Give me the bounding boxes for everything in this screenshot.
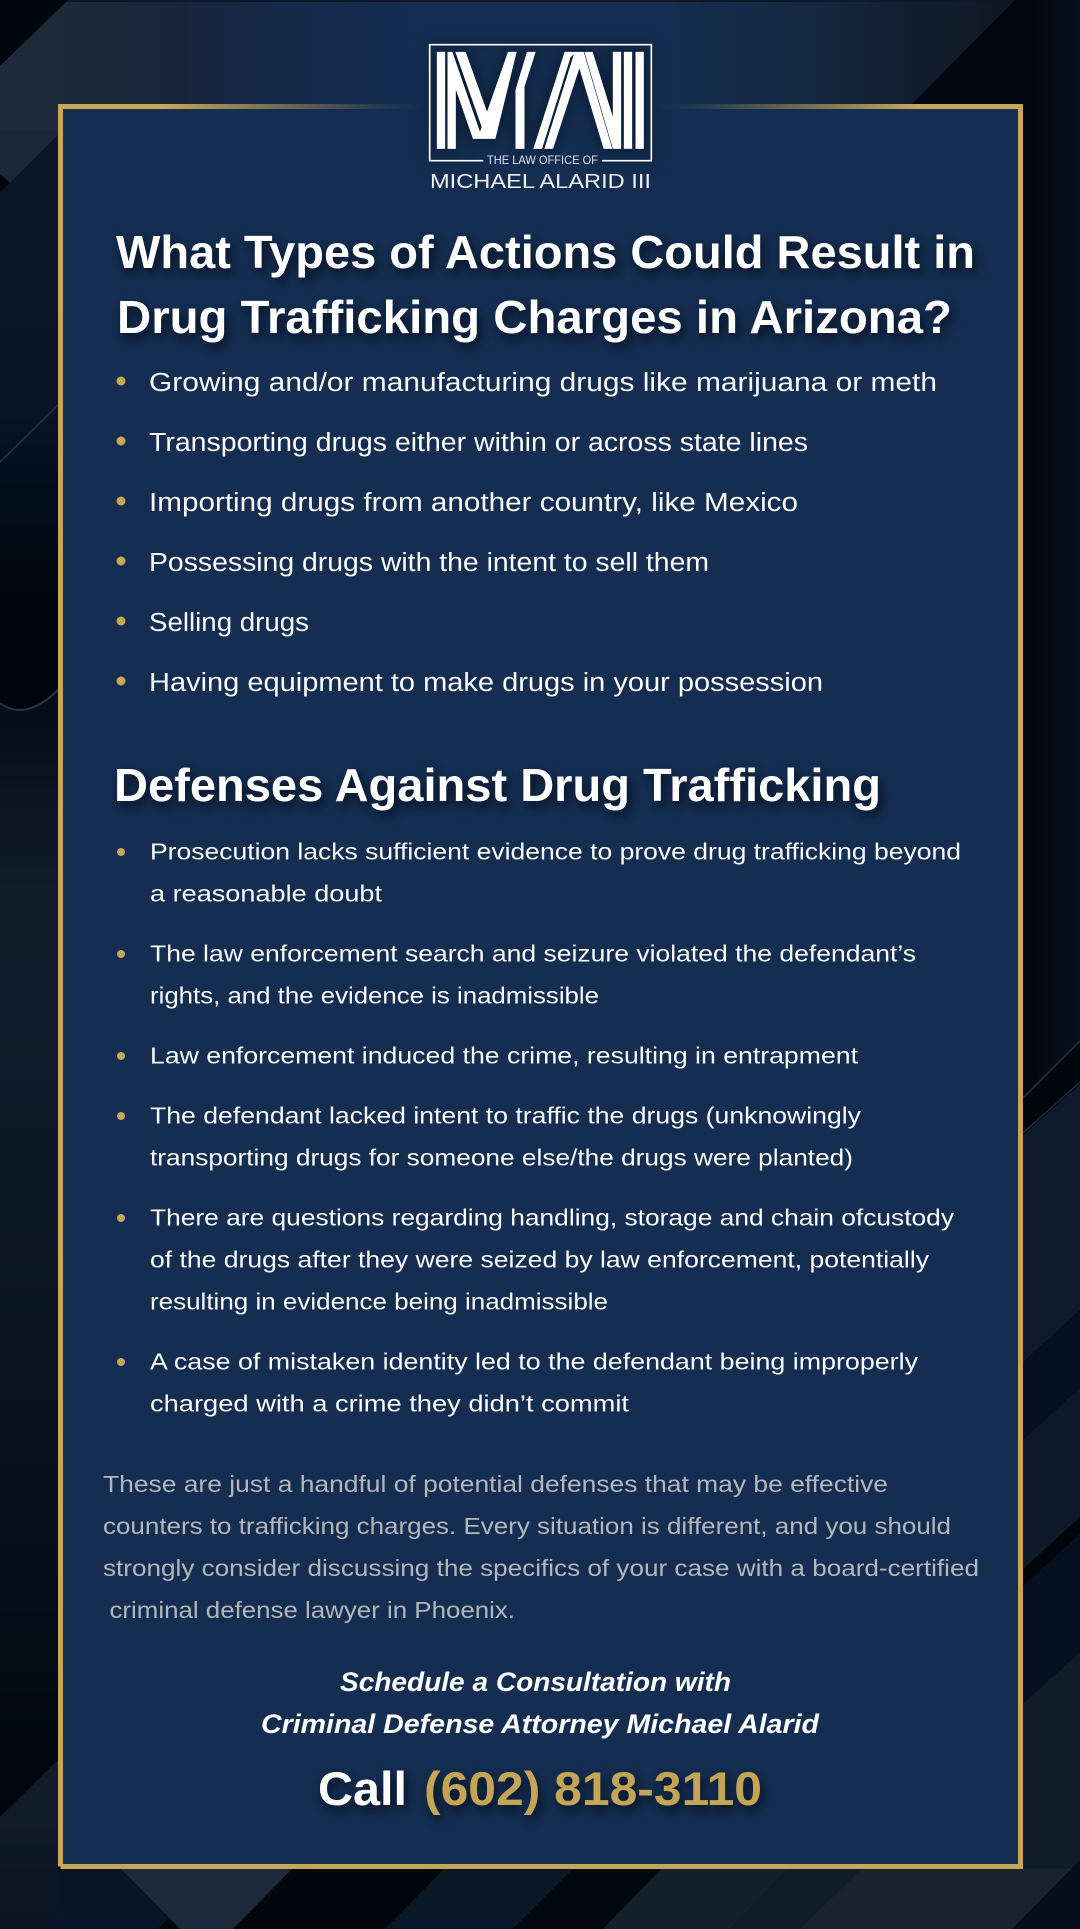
logo text: law office: THE LAW OFFICE OF xyxy=(487,153,598,167)
list: actions that could result in charges: Having equipment to make drugs in your possession xyxy=(149,669,823,697)
closing paragraph: criminal defense lawyer in Phoenix. xyxy=(110,1597,515,1623)
list: defenses against drug trafficking: a reasonable doubt xyxy=(150,880,383,906)
list: defenses against drug trafficking: There are questions regarding handling, storage and chain ofcustody xyxy=(150,1204,954,1230)
list: defenses against drug trafficking: The law enforcement search and seizure violated the defendant’s xyxy=(150,940,916,966)
closing paragraph: strongly consider discussing the specifics of your case with a board-certified xyxy=(103,1555,979,1581)
title xyxy=(116,226,975,343)
list: defenses against drug trafficking: A case of mistaken identity led to the defendant being improperly xyxy=(150,1348,918,1374)
list: actions that could result in charges: Selling drugs xyxy=(149,609,309,637)
list: actions that could result in charges: Possessing drugs with the intent to sell them xyxy=(149,549,709,577)
closing paragraph xyxy=(103,1471,979,1623)
list: defenses against drug trafficking: rights, and the evidence is inadmissible xyxy=(150,982,599,1008)
heading: defenses: Defenses Against Drug Trafficking xyxy=(114,759,881,811)
phone number: Call xyxy=(318,1762,407,1815)
list: defenses against drug trafficking: transporting drugs for someone else/the drugs were planted) xyxy=(150,1144,853,1170)
call to action text: Schedule a Consultation with xyxy=(340,1667,731,1697)
phone number: (602) 818-3110 xyxy=(424,1762,762,1815)
list: defenses against drug trafficking: Law enforcement induced the crime, resulting in entrapment xyxy=(150,1042,859,1068)
list: actions that could result in charges: Growing and/or manufacturing drugs like marijuana or meth xyxy=(149,369,937,397)
list: defenses against drug trafficking: Prosecution lacks sufficient evidence to prove drug trafficking beyond xyxy=(150,838,961,864)
logo mark: MA monogram in frame xyxy=(430,45,651,161)
title: What Types of Actions Could Result in xyxy=(116,226,975,278)
logo: The Law Office of Michael Alarid III xyxy=(430,45,651,193)
list: defenses against drug trafficking xyxy=(117,838,961,1416)
list: actions that could result in charges xyxy=(116,369,937,697)
closing paragraph: These are just a handful of potential defenses that may be effective xyxy=(103,1471,888,1497)
closing paragraph: counters to trafficking charges. Every situation is different, and you should xyxy=(103,1513,951,1539)
list: actions that could result in charges: Importing drugs from another country, like Mexico xyxy=(149,489,798,517)
call to action text xyxy=(261,1667,820,1739)
list: defenses against drug trafficking: of the drugs after they were seized by law enforcement, potentially xyxy=(150,1246,929,1272)
logo text: attorney name: MICHAEL ALARID III xyxy=(430,171,651,193)
list: actions that could result in charges: Transporting drugs either within or across state lines xyxy=(149,429,808,457)
list: defenses against drug trafficking: The defendant lacked intent to traffic the drugs (unknowingly xyxy=(150,1102,861,1128)
list: defenses against drug trafficking: charged with a crime they didn’t commit xyxy=(150,1390,630,1416)
title: Drug Trafficking Charges in Arizona? xyxy=(117,291,952,343)
call to action text: Criminal Defense Attorney Michael Alarid xyxy=(261,1709,820,1739)
list: defenses against drug trafficking: resulting in evidence being inadmissible xyxy=(150,1288,608,1314)
